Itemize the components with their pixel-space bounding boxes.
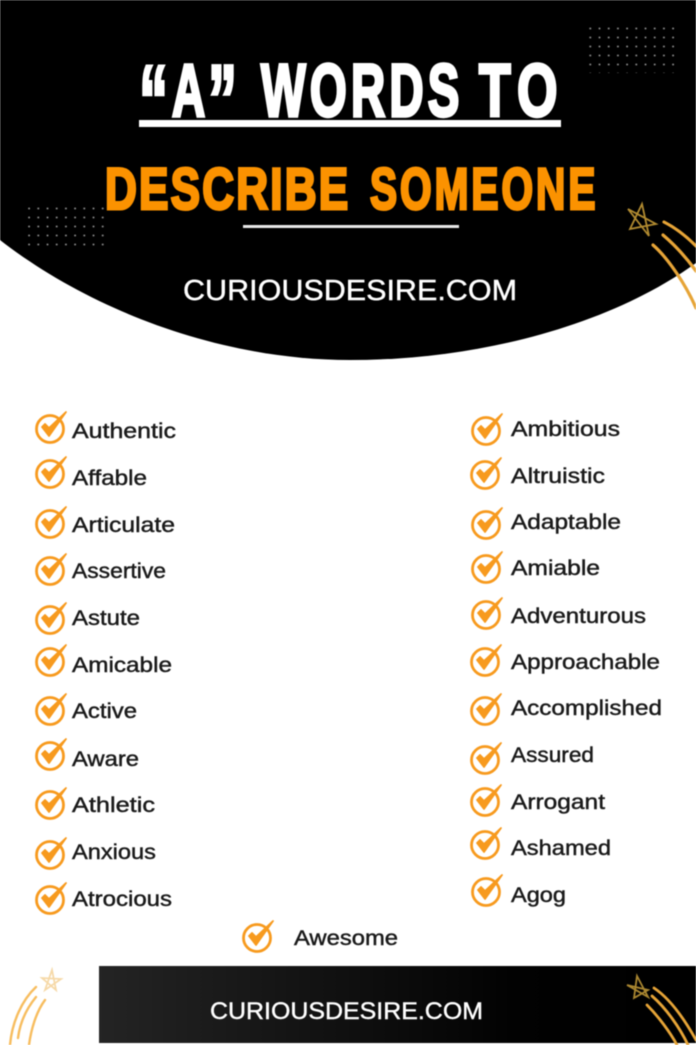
item: Ashamed: Ashamed [511,837,611,860]
icon: shooting star header [628,204,696,308]
item: Arrogant: Arrogant [511,791,605,814]
item: Amicable [36,645,172,677]
item: Ambitious [472,414,620,444]
item: Awesome [244,921,398,952]
item: Affable: Affable [72,467,147,490]
item: Astute: Astute [72,607,140,630]
item: Ashamed [472,828,611,860]
item: Awesome: Awesome [294,927,398,950]
right word column [472,414,662,907]
item: Atrocious [36,883,172,914]
item: Adventurous: Adventurous [511,605,646,628]
item: Approachable: Approachable [511,651,660,674]
item: Adaptable [472,508,621,538]
footer website url: CURIOUSDESIRE.COM [210,998,483,1025]
dot pattern: left [24,202,108,248]
item: Anxious: Anxious [72,841,156,864]
item: Adventurous [472,598,646,628]
item: Athletic [36,788,155,818]
icon: shooting star footer right [627,976,696,1045]
item: Active [36,694,137,724]
icon: shooting star bottom left [10,970,61,1045]
item: Approachable [472,645,660,676]
item: Active: Active [72,700,137,723]
title line one [139,46,561,157]
item: Altruistic: Altruistic [511,465,605,488]
item: Amiable [472,552,600,582]
item: Agog [472,875,566,907]
title line one: A [172,50,205,133]
title line two: DESCRIBE [105,156,348,221]
dot pattern: top right [589,24,681,73]
item: Amicable: Amicable [72,654,172,677]
item: Articulate: Articulate [72,514,175,537]
title line one: ” [208,46,237,157]
item: Accomplished [472,694,662,724]
item: Adaptable: Adaptable [511,511,621,534]
item: Amiable: Amiable [511,557,600,580]
header website url: CURIOUSDESIRE.COM [183,275,517,307]
black header shape [0,0,696,360]
item: Aware: Aware [72,748,139,771]
item: Arrogant [472,785,605,816]
footer banner [99,966,696,1043]
item: Ambitious: Ambitious [511,418,620,441]
left word column [36,412,176,914]
item: Anxious [36,838,156,868]
title line two: SOMEONE [370,157,595,222]
item: Assertive [36,554,166,584]
item: Astute [36,603,140,634]
title line one: “ [139,46,168,157]
title line two [105,156,595,228]
item: Articulate [36,507,175,538]
item: Altruistic [472,458,605,488]
item: Authentic: Authentic [72,420,176,443]
item: Aware [36,739,139,771]
item: Accomplished: Accomplished [511,697,662,720]
item: Affable [36,457,147,490]
title line one: WORDS [261,50,459,133]
title line one: TO [479,49,557,132]
item: Assertive: Assertive [72,560,166,583]
item: Assured: Assured [511,744,594,767]
item: Assured [472,743,594,774]
item: Atrocious: Atrocious [72,888,172,911]
item: Athletic: Athletic [72,794,155,817]
item: Authentic [36,412,176,443]
item: Agog: Agog [511,884,566,907]
